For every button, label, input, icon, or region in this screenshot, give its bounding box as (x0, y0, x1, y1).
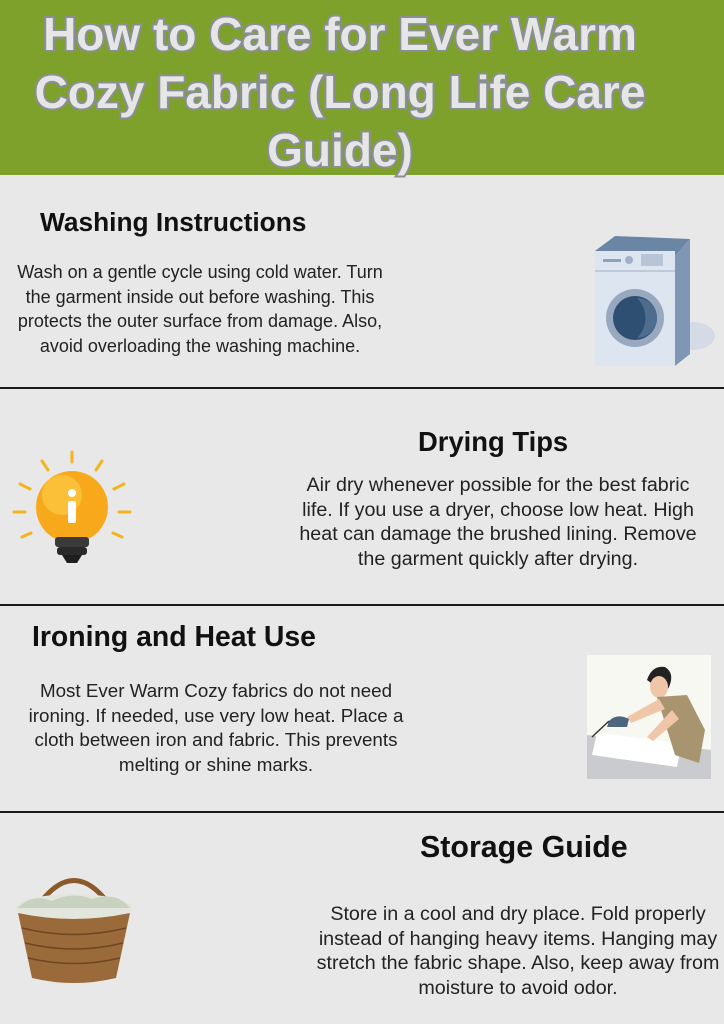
title: How to Care for Ever Warm (43, 8, 637, 60)
panel: washing (17, 207, 715, 366)
text: storage: stretch the fabric shape. Also, keep away from (317, 952, 719, 974)
text: storage: moisture to avoid odor. (418, 977, 618, 999)
icon: washing machine (595, 236, 715, 366)
text: ironing: Most Ever Warm Cozy fabrics do not need (40, 680, 392, 701)
text: washing: the garment inside out before washing. This (26, 287, 374, 307)
panel: storage (16, 830, 719, 999)
icon: light bulb (12, 450, 132, 563)
title: Cozy Fabric (Long Life Care (35, 66, 645, 118)
text: ironing (29, 680, 404, 775)
text: ironing: ironing. If needed, use very low heat. Place a (29, 705, 403, 726)
heading: drying: Drying Tips (418, 426, 568, 457)
text: drying: Air dry whenever possible for the best fabric (306, 474, 690, 496)
title (34, 8, 646, 178)
text: storage: Store in a cool and dry place. Fold properly (330, 903, 706, 925)
text: washing: avoid overloading the washing machine. (40, 336, 360, 356)
heading: washing: Washing Instructions (40, 207, 306, 237)
panel: drying (12, 426, 697, 570)
panel: ironing (29, 621, 711, 779)
heading: storage: Storage Guide (420, 830, 628, 864)
text: washing: protects the outer surface from damage. Also, (18, 311, 382, 331)
header banner (0, 0, 724, 175)
text: drying: heat can damage the brushed lining. Remove (299, 523, 697, 545)
title: Guide) (267, 124, 413, 176)
text: drying (299, 474, 697, 570)
text: drying: the garment quickly after drying. (358, 548, 638, 570)
text: storage: instead of hanging heavy items. Hanging may (319, 928, 717, 950)
text: storage (317, 903, 719, 999)
text: ironing: cloth between iron and fabric. This prevents (35, 729, 397, 750)
icon: person ironing (587, 655, 711, 779)
text: washing (17, 262, 383, 356)
text: ironing: melting or shine marks. (119, 754, 313, 775)
text: washing: Wash on a gentle cycle using cold water. Turn (17, 262, 383, 282)
icon: laundry basket (16, 878, 132, 983)
text: drying: life. If you use a dryer, choose low heat. High (302, 499, 694, 521)
heading: ironing: Ironing and Heat Use (32, 621, 316, 653)
